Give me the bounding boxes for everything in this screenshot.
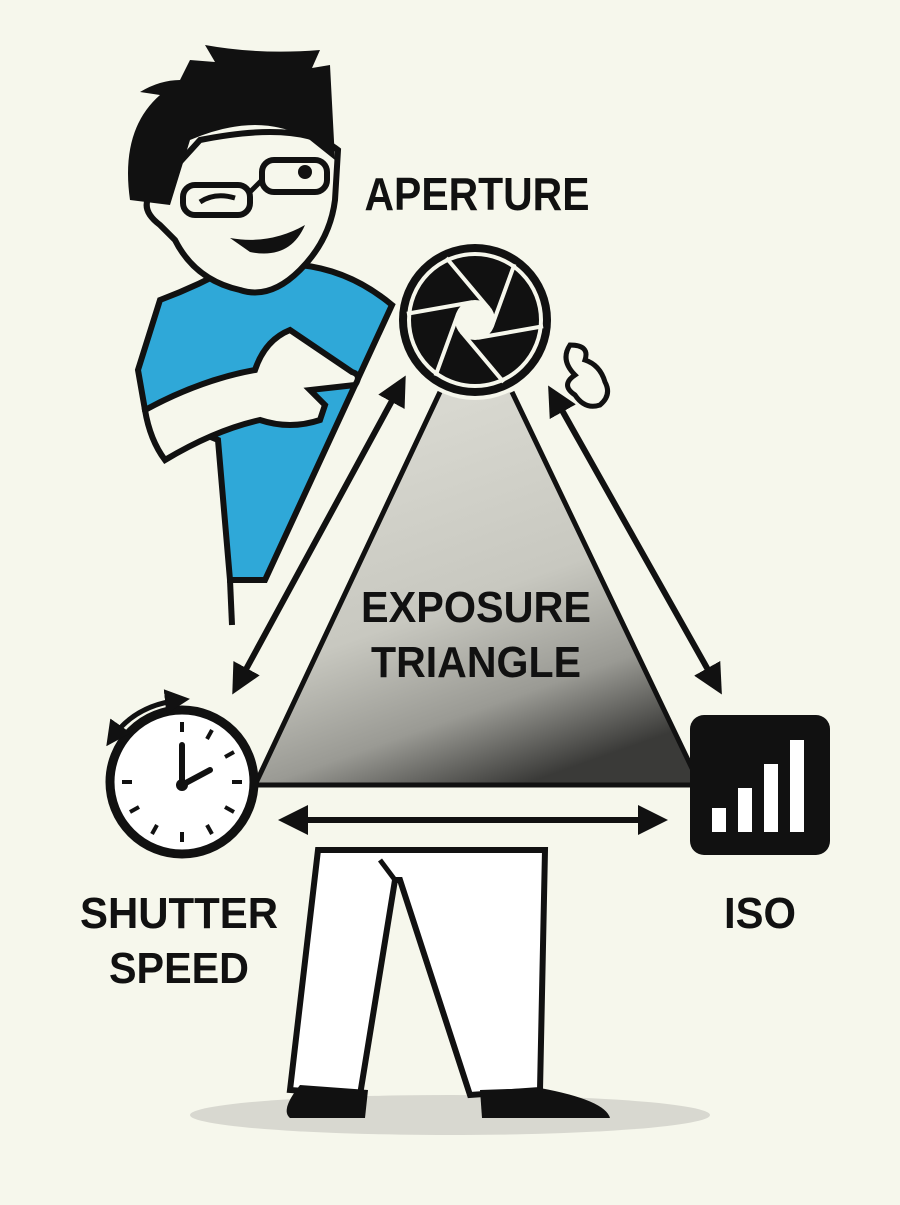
arm and pointing hand xyxy=(145,330,358,460)
triangle xyxy=(255,392,700,785)
smile xyxy=(230,225,305,253)
ground shadow xyxy=(190,1095,710,1135)
clock icon xyxy=(110,700,254,854)
arrows xyxy=(238,386,716,820)
legs xyxy=(287,850,610,1118)
central label: EXPOSURE xyxy=(361,583,591,632)
ISO icon xyxy=(690,715,830,855)
thumbs-up hand xyxy=(566,345,608,406)
head xyxy=(147,132,338,292)
character xyxy=(128,45,610,1118)
label: iso: ISO xyxy=(724,889,796,938)
title: aperture: APERTURE xyxy=(364,168,590,220)
hair xyxy=(128,45,335,205)
central label xyxy=(361,583,591,687)
label: shutter speed xyxy=(80,889,278,993)
central label: TRIANGLE xyxy=(371,638,581,687)
glasses xyxy=(183,185,250,215)
aperture icon xyxy=(395,240,555,400)
shirt xyxy=(138,265,392,580)
label: shutter speed: SPEED xyxy=(109,944,249,993)
label: shutter speed: SHUTTER xyxy=(80,889,278,938)
